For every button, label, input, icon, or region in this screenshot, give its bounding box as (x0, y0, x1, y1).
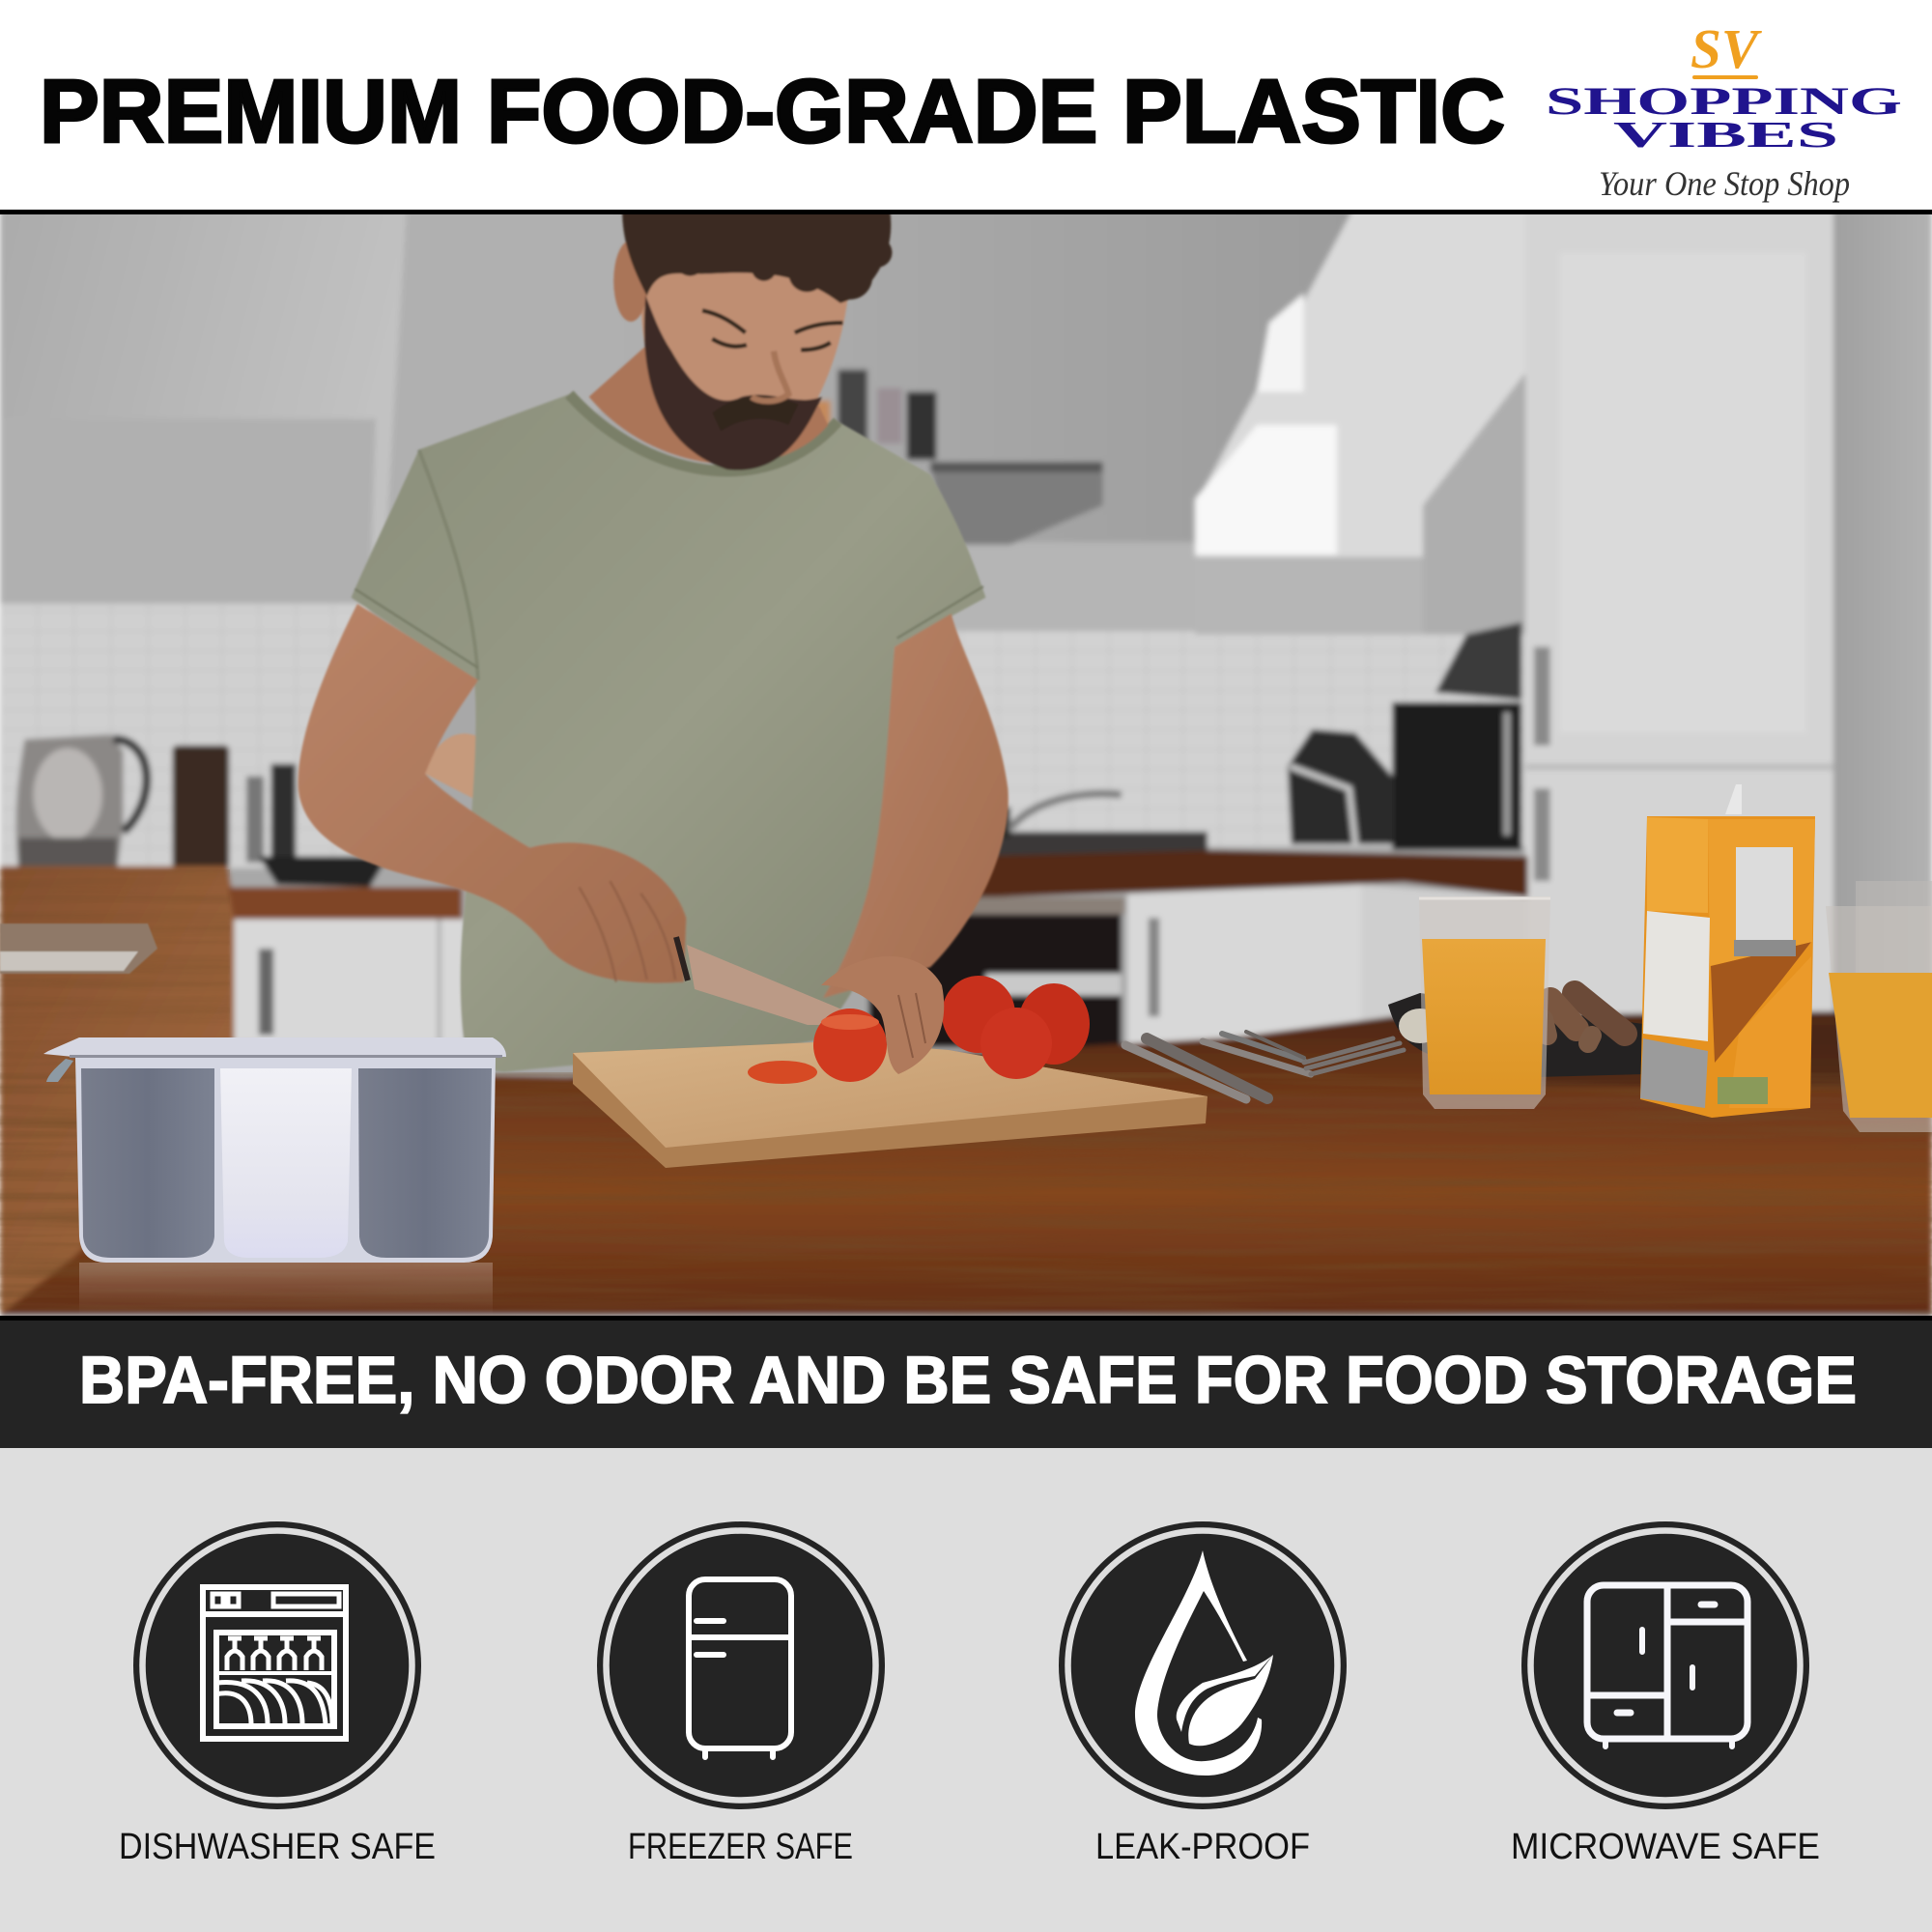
banner text: BPA-FREE, NO ODOR AND BE SAFE FOR FOOD STORAGE (79, 1343, 1857, 1417)
kitchen photo scene (0, 210, 1932, 1319)
dark banner (0, 1321, 1932, 1448)
plate and sausages (1388, 993, 1643, 1077)
man: right arm (823, 613, 1009, 998)
carton: barcode (1640, 1038, 1708, 1108)
man: shirt (352, 394, 985, 1072)
man: brows and eyes (702, 310, 842, 350)
icon: water drop with leaf (1059, 1521, 1347, 1809)
hob and pan (997, 828, 1211, 862)
logo wordmark line one: SHOPPING (1546, 79, 1902, 123)
lower rule (0, 1316, 1932, 1321)
icon: microwave cabinet (1521, 1521, 1809, 1809)
title: PREMIUM FOOD-GRADE PLASTIC (40, 61, 1505, 161)
logo: Shopping Vibes (1546, 17, 1902, 203)
product reflection (79, 1263, 493, 1316)
man: hair (622, 210, 892, 303)
product lid clip (46, 1059, 73, 1082)
back juice glass (1856, 881, 1932, 978)
carton: nutrition label (1643, 911, 1710, 1041)
logo monogram SV: SV (1690, 17, 1762, 80)
label: microwave safe: MICROWAVE SAFE (1511, 1827, 1820, 1867)
man: ear (613, 241, 648, 322)
product: left grey cup (81, 1068, 214, 1258)
juice carton (1640, 784, 1815, 1118)
man: beard (644, 296, 822, 470)
kitchen background (0, 210, 1932, 1319)
knife (673, 936, 842, 1025)
feature: dishwasher safe (119, 1521, 436, 1867)
man (298, 210, 1009, 1072)
carton: body (1640, 816, 1815, 1118)
carton: front window (1736, 847, 1793, 940)
header band (0, 0, 1932, 210)
carton: grey tag (1734, 940, 1796, 956)
product: white cup (220, 1068, 352, 1258)
tomatoes (748, 976, 1090, 1084)
label: dishwasher safe: DISHWASHER SAFE (119, 1827, 436, 1867)
carton: spout (1725, 784, 1742, 814)
label: leak-proof: LEAK-PROOF (1095, 1827, 1310, 1867)
feature: freezer safe (597, 1521, 885, 1867)
main counter (0, 1010, 1932, 1315)
man: left arm and knife hand (298, 604, 686, 983)
logo wordmark line two: VIBES (1613, 115, 1838, 156)
product lid (43, 1037, 506, 1057)
logo tagline: Your One Stop Shop (1599, 164, 1850, 203)
right hand holding tomato (821, 956, 944, 1074)
shelf items (838, 370, 867, 443)
carton: upper slices (1708, 819, 1815, 966)
carton: lower orange slice (1729, 956, 1811, 1108)
top rule (0, 210, 1932, 214)
man: mustache (713, 398, 798, 429)
feature: leak-proof (1059, 1521, 1347, 1867)
product body (75, 1058, 496, 1263)
sink (0, 923, 157, 974)
man: face (640, 270, 848, 402)
wood grain: main counter (0, 1072, 1932, 1316)
carton: brown shadow (1711, 942, 1811, 1063)
wood grain: side counter (0, 869, 230, 1072)
cooker hood (930, 466, 1103, 545)
man: neck (589, 345, 828, 465)
product: right grey cup (358, 1068, 492, 1258)
cutlery (1125, 1032, 1404, 1099)
icon: fridge (597, 1521, 885, 1809)
features panel (0, 1448, 1932, 1932)
left side counter (0, 867, 261, 1315)
toaster and microwave (1392, 702, 1521, 850)
juice glass (1419, 896, 1550, 1109)
cutting board (573, 1041, 1208, 1168)
product: storage container (43, 1037, 506, 1316)
back counter (980, 847, 1532, 900)
label: freezer safe: FREEZER SAFE (628, 1827, 853, 1867)
feature: microwave safe (1511, 1521, 1820, 1867)
man: second arm glimpse (425, 733, 478, 801)
kettle (15, 734, 124, 868)
front juice glass (1826, 906, 1932, 1132)
icon: dishwasher (133, 1521, 421, 1809)
carton: traffic-light label (1718, 1077, 1768, 1104)
